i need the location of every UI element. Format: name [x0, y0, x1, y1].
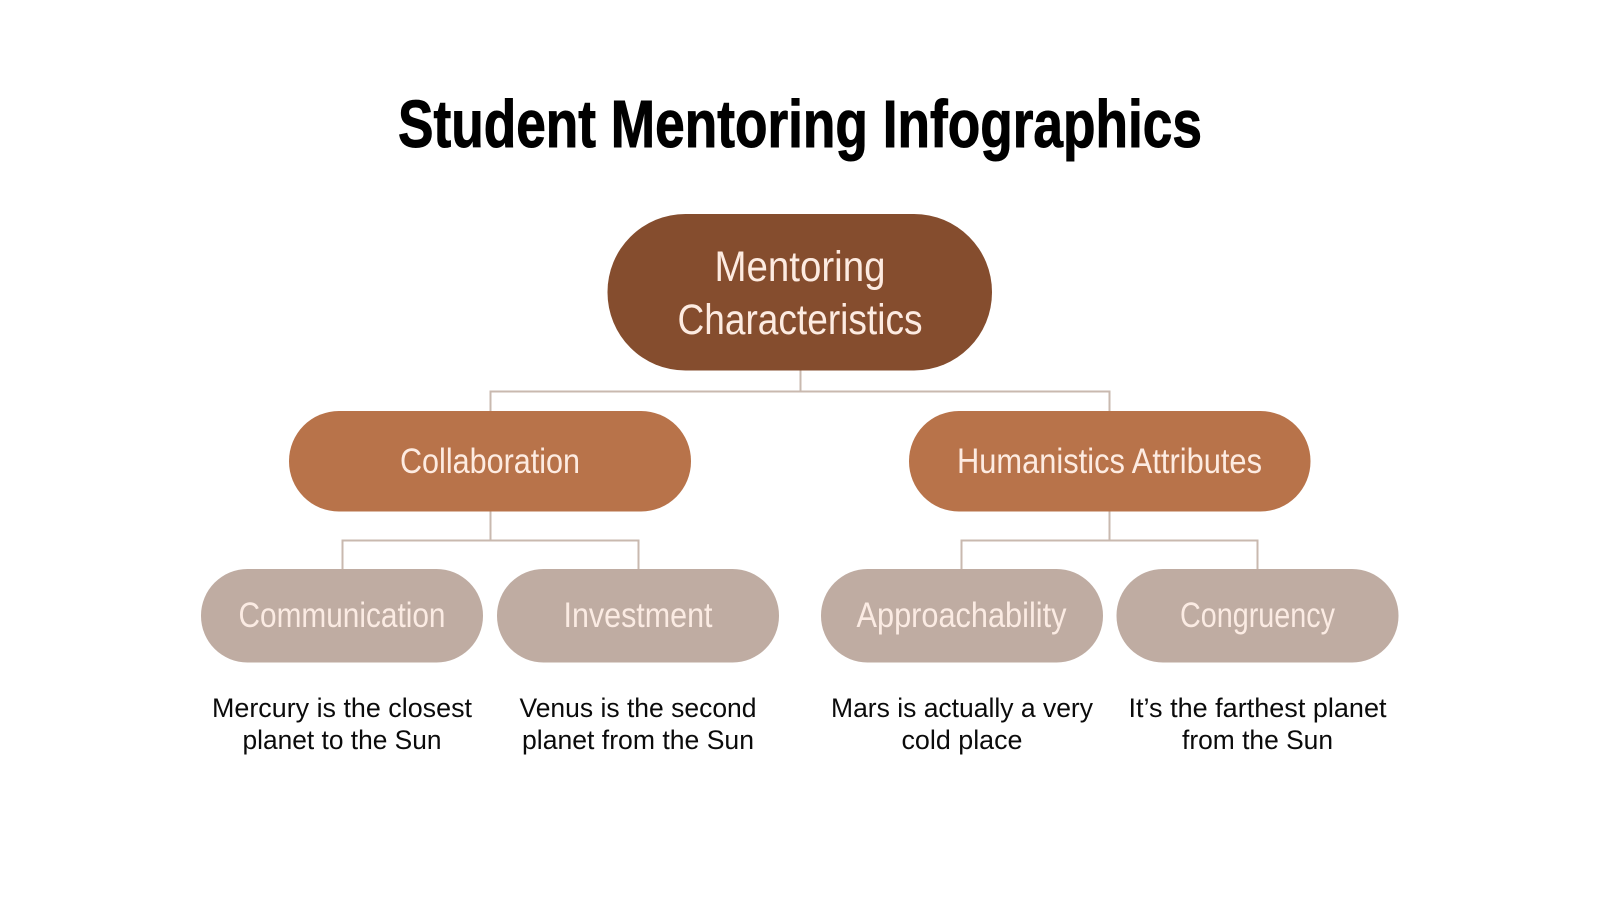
description: Approachability: cold place — [902, 725, 1022, 755]
node: Congruency: Congruency — [1180, 596, 1335, 635]
description: Congruency — [1128, 693, 1387, 755]
description: Congruency: It’s the farthest planet — [1128, 693, 1387, 723]
node: Communication — [201, 569, 483, 662]
node: Congruency — [1116, 569, 1398, 662]
root node: Mentoring Characteristics: Mentoring — [714, 243, 886, 291]
description: Approachability: Mars is actually a very — [831, 693, 1094, 723]
description: Investment: Venus is the second — [520, 693, 756, 723]
connector: root to second level — [490, 370, 1110, 411]
description: Investment: planet from the Sun — [522, 725, 754, 755]
node: Humanistics Attributes: Humanistics Attributes — [957, 442, 1262, 481]
node: Communication: Communication — [238, 596, 446, 635]
description: Approachability — [831, 693, 1094, 755]
description: Congruency: from the Sun — [1182, 725, 1333, 755]
node: Approachability — [821, 569, 1103, 662]
description: Communication — [212, 693, 473, 755]
root node: Mentoring Characteristics: Characteristics — [678, 296, 922, 344]
description: Communication: Mercury is the closest — [212, 693, 473, 723]
node: Investment — [497, 569, 779, 662]
title: Student Mentoring Infographics — [398, 87, 1202, 162]
connector: Humanistics Attributes to children — [962, 511, 1258, 569]
node: Humanistics Attributes — [909, 411, 1310, 512]
node: Approachability: Approachability — [856, 596, 1067, 635]
node: Collaboration — [289, 411, 691, 512]
root node: Mentoring Characteristics — [608, 214, 992, 370]
description: Communication: planet to the Sun — [242, 725, 442, 755]
node: Collaboration: Collaboration — [400, 442, 580, 481]
node: Investment: Investment — [564, 596, 713, 635]
connector: Collaboration to children — [342, 511, 638, 569]
description: Investment — [520, 693, 756, 755]
